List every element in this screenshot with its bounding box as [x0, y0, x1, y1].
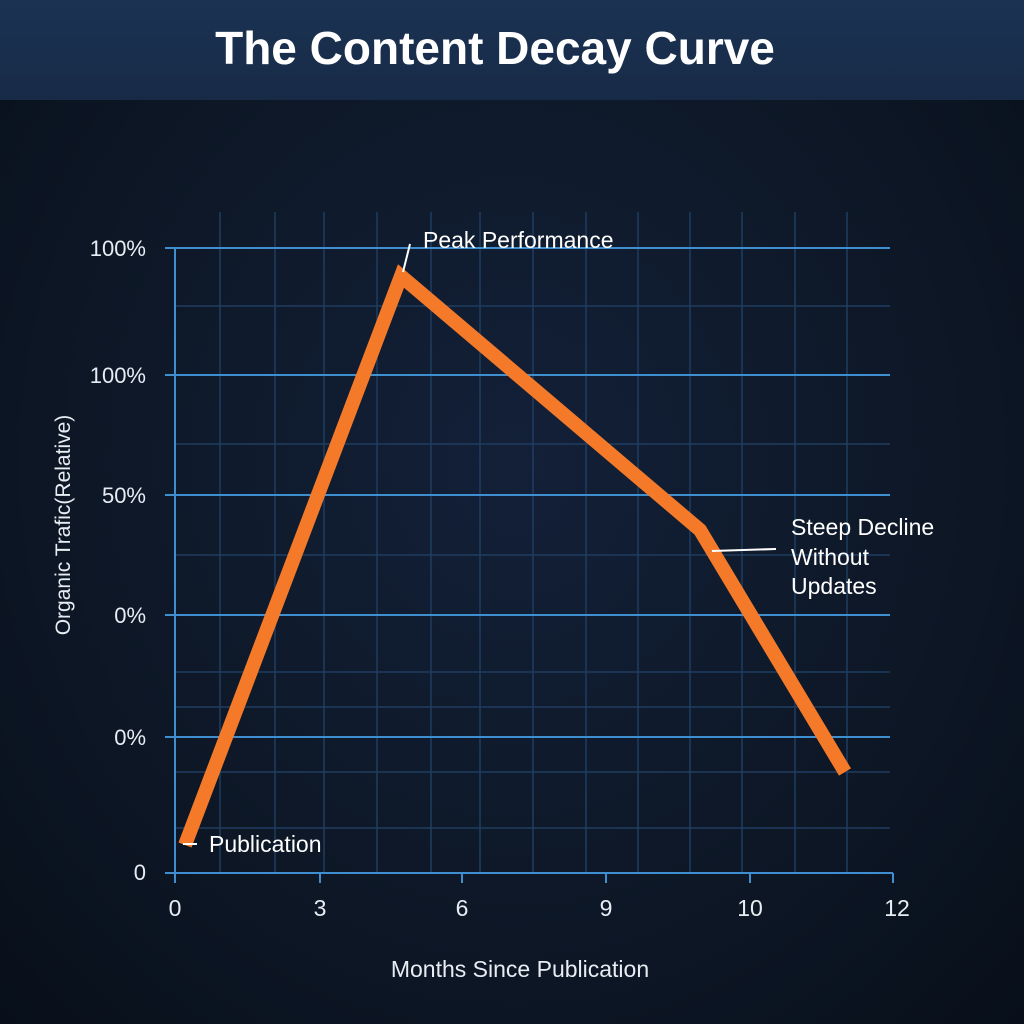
- y-axis labels: 0: [134, 860, 146, 885]
- x-axis labels: 3: [314, 895, 326, 921]
- y-axis title: Organic Trafic(Relative): [52, 415, 75, 635]
- title: The Content Decay Curve: [215, 22, 775, 74]
- y-axis labels: [90, 236, 146, 885]
- x-axis labels: 12: [884, 895, 910, 921]
- y-axis labels: 0%: [114, 725, 146, 750]
- x-axis labels: 0: [169, 895, 181, 921]
- y-axis labels: 0%: [114, 603, 146, 628]
- callout: publication: Publication: [209, 831, 322, 857]
- header band: [0, 0, 1024, 100]
- x-axis labels: 6: [456, 895, 468, 921]
- x-axis labels: 9: [600, 895, 612, 921]
- y-axis labels: 50%: [102, 483, 146, 508]
- callout: decline: Without: [791, 544, 870, 570]
- y-axis labels: 100%: [90, 363, 146, 388]
- x-axis title: Months Since Publication: [391, 956, 649, 982]
- callout: decline: Steep Decline: [791, 514, 934, 540]
- callout: decline: [712, 514, 934, 599]
- x-axis labels: 10: [737, 895, 763, 921]
- callout: decline: Updates: [791, 573, 877, 599]
- callout: peak: [403, 227, 613, 272]
- decay curve: [185, 276, 845, 845]
- y-axis labels: 100%: [90, 236, 146, 261]
- x-axis labels: [169, 895, 910, 921]
- callout: peak: Peak Performance: [423, 227, 613, 253]
